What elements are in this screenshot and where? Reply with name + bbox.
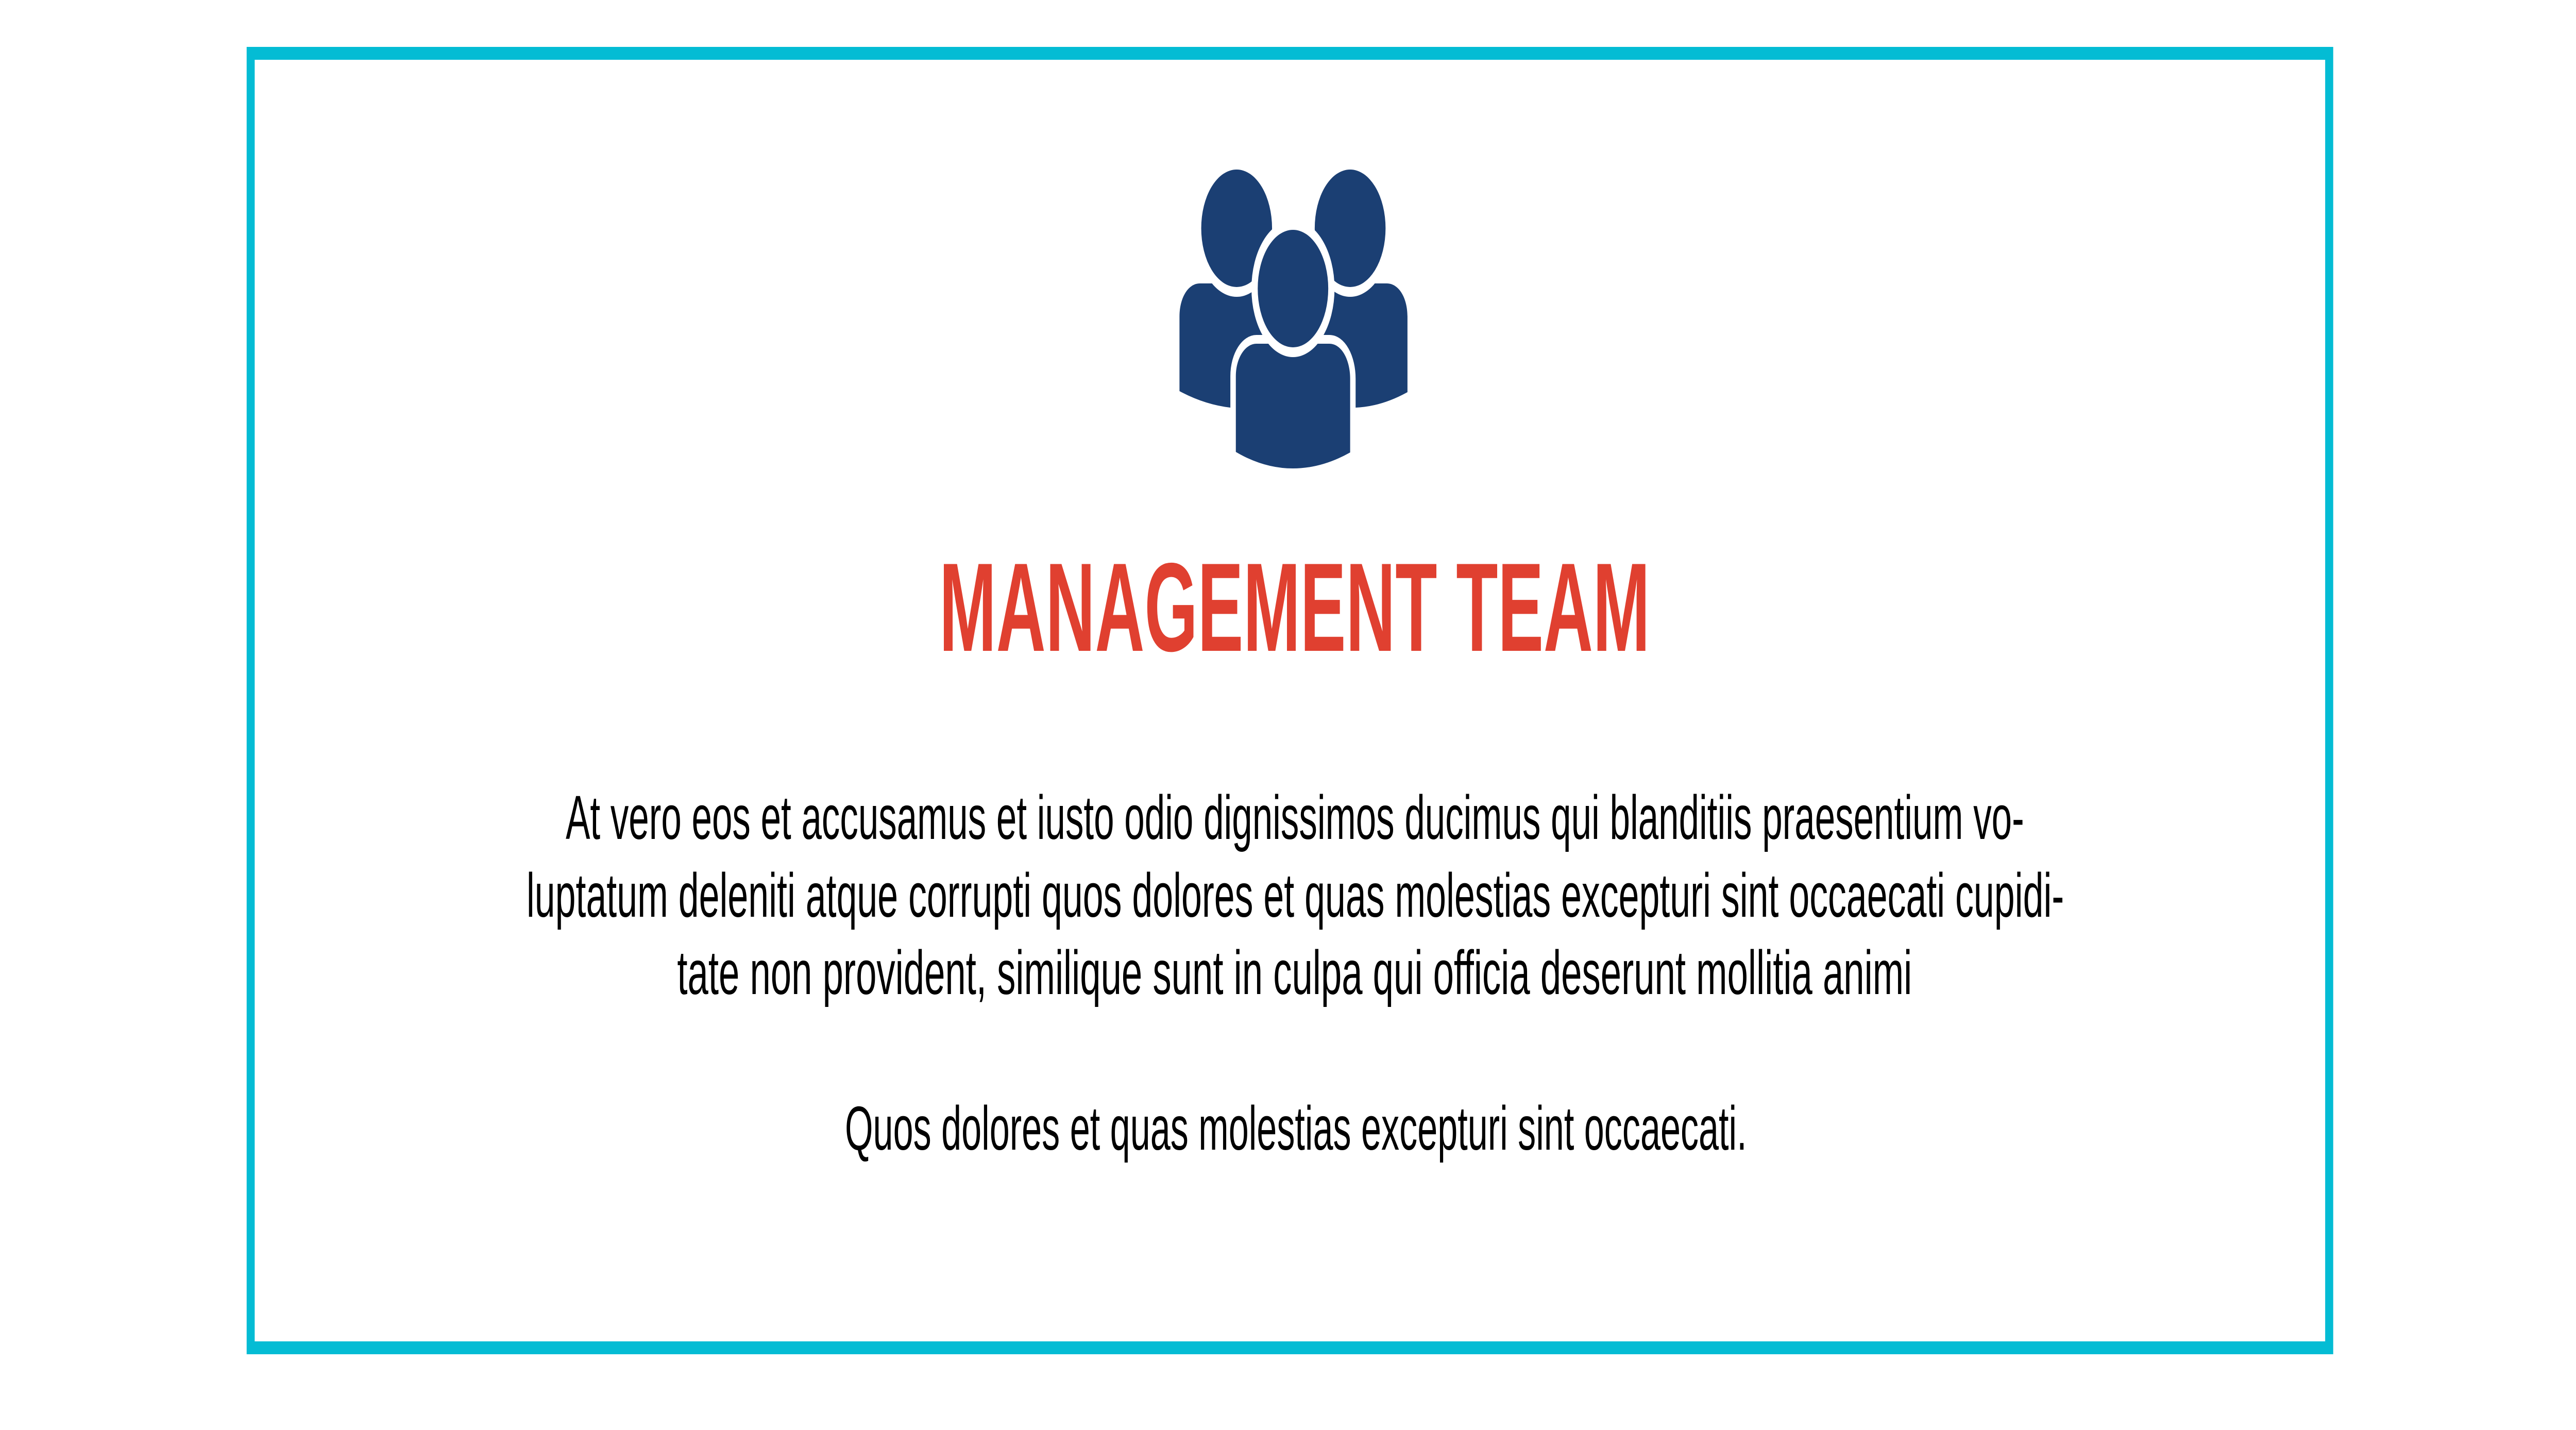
title: MANAGEMENT TEAM	[939, 537, 1650, 678]
body paragraph: At vero eos et accusamus et iusto odio dignissimos ducimus qui blanditiis praesentium vo-	[566, 783, 2024, 852]
panel border	[251, 54, 2329, 1348]
body paragraph	[527, 783, 2064, 1007]
icon: management team group of three people	[1179, 160, 1408, 468]
icon: right person	[1301, 160, 1408, 412]
closing sentence: Quos dolores et quas molestias excepturi sint occaecati.	[845, 1094, 1747, 1163]
body paragraph: tate non provident, similique sunt in culpa qui officia deserunt mollitia animi	[677, 938, 1912, 1007]
icon: front person	[1236, 220, 1350, 468]
icon: left person	[1179, 160, 1285, 412]
body paragraph: luptatum deleniti atque corrupti quos dolores et quas molestias excepturi sint occaecati cupidi-	[527, 861, 2064, 930]
